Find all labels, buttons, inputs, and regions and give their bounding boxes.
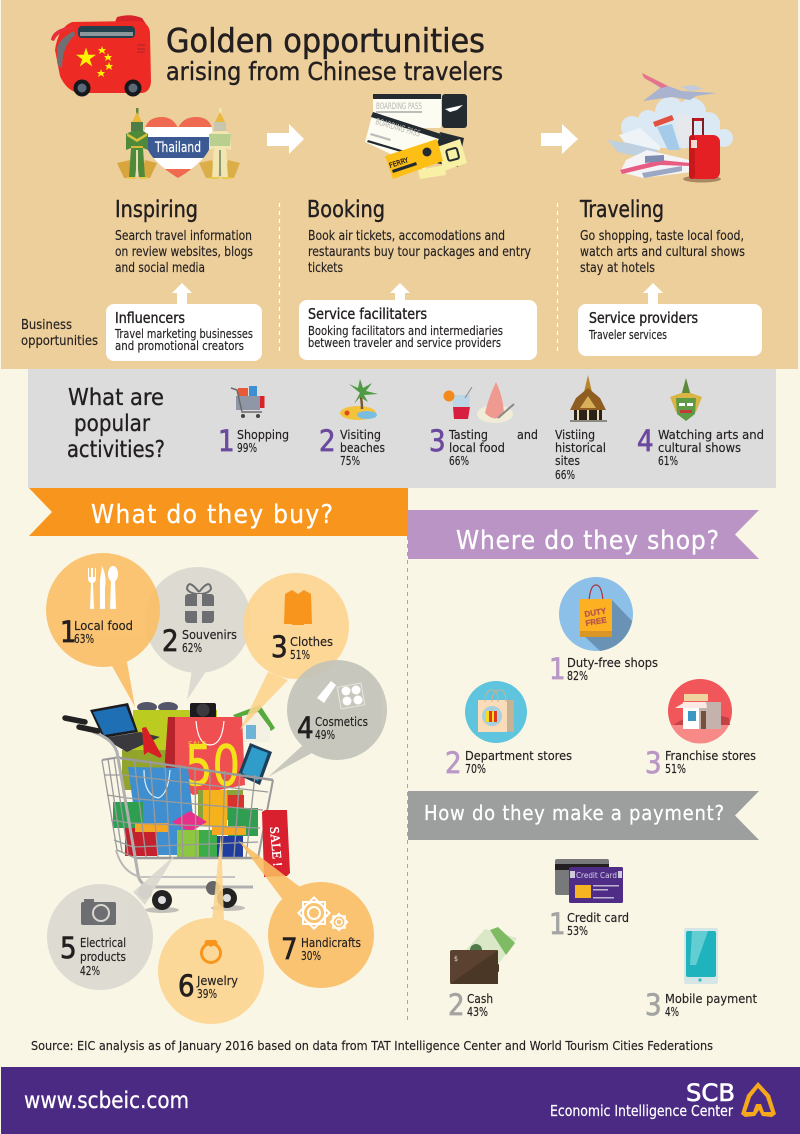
- heading: what are popular activities: [67, 385, 165, 463]
- section: Inspiring: Search travel information: [115, 228, 252, 244]
- cart handle: [65, 718, 98, 731]
- label: business opportunities: opportunities: [21, 333, 98, 349]
- callout: Influencers: Influencers: [115, 309, 185, 327]
- SCB wordmark: [550, 1079, 735, 1120]
- activity: historical sites: historical: [555, 440, 606, 455]
- section: Traveling: watch arts and cultural shows: [580, 244, 745, 260]
- arrow: service facilitaters up: [390, 283, 410, 301]
- callout: Service providers: Service providers: [589, 309, 698, 327]
- icon: duty free bag: [559, 577, 633, 651]
- shop: department stores: Department stores: [465, 748, 572, 763]
- activity: tasting local food: 3: [429, 424, 446, 458]
- bubble: electrical products: products: [80, 949, 126, 964]
- cart wheels: [138, 881, 245, 913]
- source note: Source: EIC analysis as of January 2016 based on data from TAT Intelligence Center and World Tourism Cities Federations: [31, 1038, 713, 1053]
- payment: mobile payment: 3: [645, 988, 662, 1022]
- callout: Service facilitaters: [299, 300, 537, 360]
- website url: www.scbeic.com: [24, 1088, 189, 1114]
- banner: how do they make a payment: [408, 791, 759, 840]
- title: Golden opportunities: [166, 21, 485, 60]
- callout: Influencers: Travel marketing businesses: [114, 326, 253, 341]
- heading: what are popular activities: activities?: [67, 437, 165, 463]
- icon: red bus with Chinese flag: [51, 15, 151, 97]
- icon: jacket: [284, 590, 312, 625]
- shop: department stores: 2: [445, 746, 462, 780]
- arrow: inspiring to booking: [267, 124, 304, 154]
- payment: credit card: 53%: [567, 923, 588, 938]
- section: Traveling: Go shopping, taste local food,: [580, 228, 744, 244]
- callout: Service providers: Traveler services: [588, 327, 667, 342]
- heading: what are popular activities: What are: [68, 385, 164, 411]
- activity: tasting local food: 66%: [449, 453, 469, 468]
- label: business opportunities: Business: [21, 317, 72, 333]
- section: Traveling: stay at hotels: [580, 260, 655, 276]
- right giant: [199, 108, 240, 179]
- shop: duty-free: [549, 577, 658, 686]
- bubble: cosmetics: Cosmetics: [315, 714, 368, 729]
- bubble: souvenirs: [145, 567, 251, 700]
- callout: Influencers: and promotional creators: [115, 338, 244, 353]
- banner: where do they shop: [408, 510, 759, 559]
- icon: boarding passes and tickets: [365, 94, 467, 179]
- payment: mobile payment: [645, 928, 758, 1022]
- bubble: jewelry: 39%: [197, 986, 217, 1001]
- heading: what are popular activities: popular: [74, 411, 150, 437]
- panel: customer journey header band: [1, 0, 798, 369]
- activity: beaches: Visiting: [340, 427, 381, 442]
- bubble: handicrafts: 30%: [301, 948, 321, 963]
- activity: historical sites: sites: [555, 453, 580, 468]
- icon: duty free bag: DUTY: [584, 606, 607, 619]
- activity: tasting local food: Tasting: [448, 427, 488, 442]
- shop: duty-free: 1: [549, 652, 566, 686]
- panel: popular activities: [28, 369, 776, 488]
- bubble: souvenirs: 2: [162, 624, 179, 658]
- banner: where do they shop: Where do they shop?: [456, 526, 719, 556]
- icon: lipstick and compact: [317, 681, 365, 709]
- icon: ring: [202, 940, 220, 962]
- cart goods: [90, 702, 275, 857]
- activity: shopping: Shopping: [237, 427, 289, 442]
- bubble: handicrafts: 7: [281, 932, 298, 966]
- activity: historical sites: Vistiing: [555, 427, 595, 442]
- icon: fork knife spoon: [88, 566, 118, 609]
- cart goods: 50: [185, 734, 240, 799]
- arrow: influencers up: [172, 283, 192, 305]
- section: Inspiring: and social media: [115, 260, 205, 276]
- activity: beaches: 2: [319, 424, 336, 458]
- section: Booking: restaurants buy tour packages and entry: [308, 244, 531, 260]
- label: business opportunities: [21, 317, 98, 349]
- icon: gift shopping bag: [465, 681, 527, 743]
- section: Inspiring: [115, 197, 253, 276]
- shop: franchise stores: Franchise stores: [665, 748, 756, 763]
- banner: how do they make a payment: How do they make a payment?: [424, 801, 724, 825]
- bubble: souvenirs: Souvenirs: [182, 627, 237, 642]
- icon: smartphone: [684, 928, 718, 984]
- icon: boarding passes and tickets: BOARDING PASS: [374, 117, 421, 140]
- shop: duty-free: 82%: [567, 668, 588, 683]
- payment: credit card: 1: [549, 907, 566, 941]
- bubble: clothes: [240, 573, 349, 730]
- bubble: local food: [46, 553, 160, 707]
- payment: mobile payment: Mobile payment: [665, 991, 758, 1006]
- shop: franchise stores: 3: [645, 746, 662, 780]
- title: arising from Chinese travelers: [166, 57, 503, 86]
- activity: historical sites: 66%: [555, 467, 575, 482]
- activity: tasting local food: [429, 382, 538, 468]
- banner: what do they buy: What do they buy?: [91, 500, 333, 530]
- icon: credit cards: Credit Card: [576, 871, 617, 880]
- callout: Influencers: [106, 304, 262, 361]
- bubble: local food: 63%: [74, 631, 94, 646]
- bubble: souvenirs: 62%: [182, 640, 202, 655]
- activity: beaches: [319, 379, 385, 468]
- footer band: [1, 1067, 800, 1134]
- activity: shopping: [218, 386, 289, 458]
- activity: arts and cultural shows: 4: [637, 424, 654, 458]
- icon: SCB logo: [741, 1082, 776, 1117]
- callout: Service providers: [578, 304, 762, 356]
- icon: duty free bag: FREE: [585, 615, 608, 628]
- cart frame and wires: [93, 732, 273, 887]
- icon: boarding passes and tickets: FERRY: [388, 156, 410, 170]
- activity: beaches: 75%: [340, 453, 360, 468]
- payment: cash: 43%: [467, 1004, 488, 1019]
- bubble: handicrafts: [238, 840, 374, 988]
- arrow: service providers up: [643, 283, 663, 305]
- bubble: clothes: Clothes: [290, 634, 333, 649]
- icon: boarding passes and tickets: BOARDING PASS: [376, 102, 422, 112]
- shop: department stores: 70%: [465, 761, 486, 776]
- payment: cash: [448, 927, 517, 1022]
- payment: cash: 2: [448, 988, 465, 1022]
- callout: Service facilitaters: between traveler and service providers: [308, 335, 501, 350]
- payment: credit card: [549, 859, 629, 941]
- callout: Service facilitaters: Booking facilitators and intermediaries: [308, 323, 503, 338]
- shop: duty-free: Duty-free shops: [567, 655, 658, 670]
- shop: department stores: [445, 681, 572, 780]
- activity: arts and cultural shows: 61%: [658, 453, 678, 468]
- icon: storefront: [668, 679, 732, 743]
- payment: credit card: Credit card: [567, 910, 629, 925]
- icon: travel collage with plane, ship, train and suitcase: [607, 73, 733, 182]
- arrow: booking to traveling: [541, 124, 578, 154]
- icon: camera: [81, 899, 116, 925]
- SCB wordmark: SCB: [686, 1079, 735, 1107]
- activity: historical sites: [555, 375, 607, 482]
- section: Inspiring: Inspiring: [115, 197, 198, 223]
- icon: Thailand heart flag with guardian giants: Thailand: [154, 140, 201, 156]
- bubble: clothes: 51%: [290, 647, 310, 662]
- bubble: cosmetics: 4: [297, 711, 314, 745]
- shop: franchise stores: [645, 679, 756, 780]
- payment: cash: Cash: [467, 991, 493, 1006]
- shop: franchise stores: 51%: [665, 761, 686, 776]
- bubble: clothes: 3: [271, 630, 288, 664]
- bubble: handicrafts: Handicrafts: [301, 935, 361, 950]
- icon: thai flower patterns: [298, 897, 347, 930]
- bubble: cosmetics: 49%: [315, 727, 335, 742]
- activity: shopping: 99%: [237, 440, 257, 455]
- sale tag: SALE !: [267, 826, 285, 867]
- bubble: local food: 1: [60, 615, 77, 649]
- icon: wallet with banknotes: $: [454, 955, 458, 963]
- bubble: cosmetics: [268, 660, 387, 777]
- activity: beaches: beaches: [340, 440, 385, 455]
- section: Traveling: Traveling: [579, 197, 664, 223]
- activity: arts and cultural shows: cultural shows: [658, 440, 741, 455]
- section: Booking: Booking: [307, 197, 385, 223]
- section: Booking: [307, 197, 531, 276]
- icon: Thailand heart flag with guardian giants: [117, 108, 240, 180]
- icon: gift: [185, 584, 214, 623]
- bubble: electrical products: 42%: [80, 963, 100, 978]
- bubble: electrical products: Electrical: [80, 935, 126, 950]
- activity: tasting local food: and: [517, 427, 538, 442]
- title: [166, 21, 503, 86]
- cart goods: SALE: [188, 740, 207, 749]
- bubble: jewelry: Jewelry: [196, 973, 238, 988]
- activity: arts and cultural shows: Watching arts and: [658, 427, 764, 442]
- section: Booking: Book air tickets, accomodations and: [308, 228, 505, 244]
- bubble: jewelry: [158, 833, 264, 1024]
- left giant: [117, 108, 157, 179]
- bubble: electrical products: [47, 855, 175, 990]
- bubble: jewelry: 6: [178, 969, 195, 1003]
- activity: shopping: 1: [218, 424, 235, 458]
- illustration: shopping cart full of goods: [65, 702, 290, 913]
- sale tag: [262, 810, 290, 877]
- bubble: electrical products: 5: [60, 931, 77, 965]
- section: Inspiring: on review websites, blogs: [115, 244, 253, 260]
- payment: mobile payment: 4%: [665, 1004, 679, 1019]
- SCB wordmark: Economic Intelligence Center: [550, 1102, 733, 1120]
- callout: Service facilitaters: Service facilitaters: [308, 305, 427, 323]
- banner: what do they buy: [29, 488, 408, 536]
- activity: tasting local food: local food: [449, 440, 505, 455]
- bubble: local food: Local food: [74, 618, 133, 633]
- activity: arts and cultural shows: [637, 378, 764, 468]
- section: Booking: tickets: [308, 260, 343, 276]
- section: Traveling: [579, 197, 745, 276]
